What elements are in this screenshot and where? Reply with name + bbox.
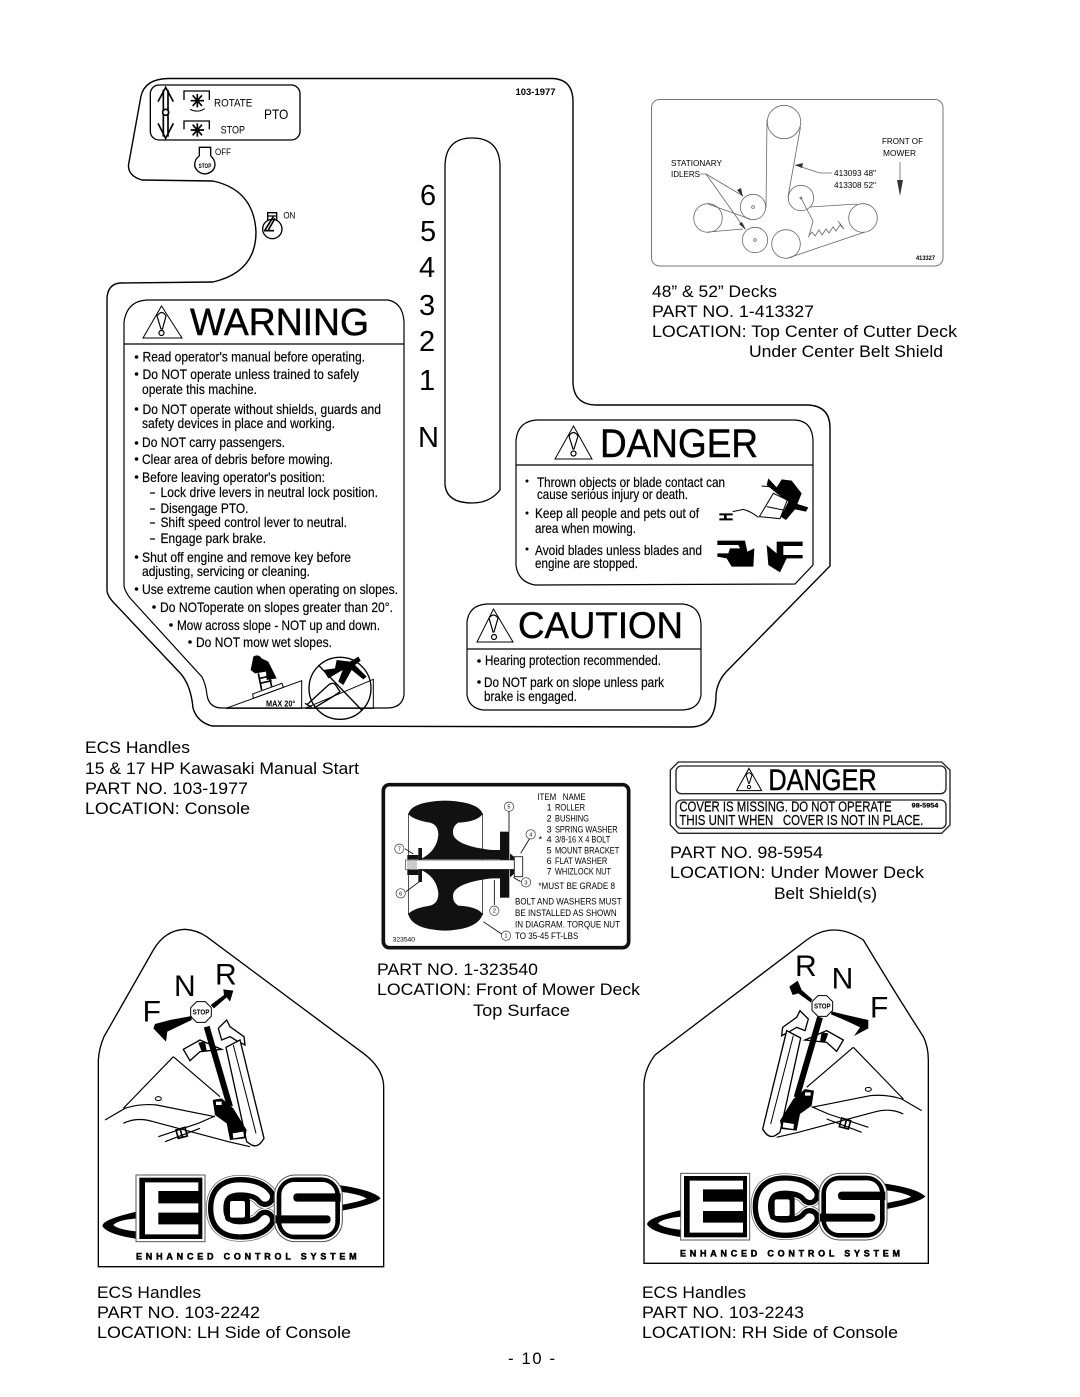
caption: right handle part number: ECS Handles (642, 1283, 746, 1302)
danger rules list: Avoid blades unless blades and (535, 542, 702, 558)
belt diagram labels: MOWER (883, 148, 916, 158)
warning rules list: Clear area of debris before mowing. (142, 451, 333, 467)
numbered callouts: 6 (399, 891, 402, 897)
item list and notes: WHIZLOCK NUT (555, 867, 611, 877)
item list and notes: TO 35-45 FT-LBS (515, 931, 578, 941)
warning rules list: Before leaving operator's position: (142, 469, 325, 485)
caption: left handle part number (97, 1283, 351, 1342)
belt diagram labels: IDLERS (671, 169, 700, 179)
speed numbers: 4 (419, 252, 435, 284)
PTO control symbols: ON (283, 210, 295, 220)
warning rules list: Disengage PTO. (160, 500, 248, 516)
numbered callouts (395, 802, 535, 940)
warning rules list: operate this machine. (142, 381, 257, 397)
warning rules list: Do NOT operate without shields, guards and (142, 401, 381, 417)
item list and notes: ITEM NAME (537, 792, 586, 802)
PTO control symbols: PTO (264, 106, 288, 122)
caption: console part number (85, 738, 359, 818)
warning triangle icon (143, 306, 182, 338)
direction arrows (153, 989, 233, 1042)
caution rules list: brake is engaged. (484, 688, 577, 704)
direction letters: N (174, 970, 196, 1003)
item list and notes: SPRING WASHER (555, 824, 618, 834)
warning rules list: Lock drive levers in neutral lock position. (160, 484, 378, 500)
warning rules list: Mow across slope - NOT up and down. (177, 617, 380, 633)
panel: roller assembly decal 323540 (383, 785, 629, 948)
warning message (679, 800, 939, 829)
panel: belt routing diagram decal 1-413327 (652, 100, 943, 266)
part code 103-1977: 103-1977 (516, 87, 556, 98)
item list and notes: IN DIAGRAM. TORQUE NUT (515, 919, 620, 929)
speed numbers: 5 (420, 216, 436, 248)
direction letters: F (870, 991, 888, 1024)
ECS logo (102, 1175, 381, 1242)
direction letters (795, 950, 888, 1024)
warning rules list: safety devices in place and working. (142, 415, 335, 431)
caption: cover decal part number: PART NO. 98-5954 (670, 843, 823, 862)
caption: roller decal part number: PART NO. 1-323540 (377, 960, 538, 979)
item list and notes: BOLT AND WASHERS MUST (515, 897, 622, 907)
stop sign: STOP (193, 1009, 210, 1016)
panel: right ECS handle decal 103-2243 (644, 930, 928, 1263)
danger rules list: cause serious injury or death. (537, 486, 688, 502)
speed numbers: 3 (419, 290, 435, 322)
stop sign (812, 996, 833, 1016)
decal borders (670, 762, 950, 833)
danger heading: DANGER (600, 422, 758, 466)
speed numbers: 1 (419, 365, 435, 397)
caption: decks part number: Under Center Belt Shield (749, 342, 943, 361)
warning message: COVER IS MISSING. DO NOT OPERATE (679, 800, 892, 816)
lever and handle drawing (105, 1020, 264, 1147)
item list and notes: 6 (547, 856, 552, 866)
caption: decks part number: LOCATION: Top Center of Cutter Deck (652, 322, 958, 341)
item list and notes: 3 (547, 824, 552, 834)
panel: warning block (124, 300, 404, 719)
speed numbers: 6 (420, 180, 436, 212)
direction arrows (789, 981, 868, 1036)
console decal outline (107, 78, 830, 727)
warning rules list: adjusting, servicing or cleaning. (142, 563, 310, 579)
direction letters: F (143, 996, 161, 1029)
caption: left handle part number: PART NO. 103-2242 (97, 1303, 260, 1322)
PTO control symbols: OFF (215, 147, 231, 157)
panel: cover missing danger decal 98-5954 (670, 762, 950, 833)
numbered callouts: 3 (524, 880, 528, 886)
caption: cover decal part number (670, 843, 925, 903)
caption: roller decal part number (377, 960, 641, 1020)
item list and notes: 3/8-16 X 4 BOLT (555, 835, 611, 845)
PTO control symbols: STOP (221, 124, 245, 136)
decal outline (644, 930, 928, 1263)
roller cross section (405, 801, 523, 931)
warning rules list (135, 348, 398, 650)
item list and notes: BUSHING (555, 814, 589, 824)
caution rules list (477, 652, 665, 704)
item list and notes: 1 (547, 803, 552, 813)
stop sign: STOP (814, 1003, 831, 1010)
warning box outline (124, 300, 404, 708)
numbered callouts: 1 (504, 934, 508, 940)
belt diagram labels: 413093 48" (834, 168, 876, 178)
caption: console part number: LOCATION: Console (85, 799, 250, 818)
heading: DANGER (768, 764, 877, 797)
caption: roller decal part number: Top Surface (473, 1001, 570, 1020)
belt diagram labels (671, 136, 935, 262)
caution rules list: Do NOT park on slope unless park (484, 674, 665, 690)
warning rules list: Do NOToperate on slopes greater than 20°. (160, 599, 393, 615)
item list and notes (393, 792, 622, 944)
item list and notes: MOUNT BRACKET (555, 845, 620, 855)
caption: roller decal part number: LOCATION: Front of Mower Deck (377, 980, 641, 999)
caption: cover decal part number: LOCATION: Under Mower Deck (670, 863, 925, 882)
danger rules list (526, 474, 725, 571)
icon: mower on 20 degree slope: MAX 20° (266, 699, 295, 709)
ECS logo (647, 1173, 925, 1240)
caution triangle icon (477, 609, 513, 642)
icon: thrown objects and running person (719, 478, 808, 520)
belt diagram arrowheads (737, 163, 903, 230)
page number: - 10 - (508, 1349, 555, 1368)
warning heading: WARNING (190, 302, 369, 344)
item list and notes: 2 (547, 814, 552, 824)
speed numbers: 2 (419, 326, 435, 358)
danger rules list: Keep all people and pets out of (535, 505, 699, 521)
logo tagline: ENHANCED CONTROL SYSTEM (136, 1251, 357, 1261)
caption: console part number: PART NO. 103-1977 (85, 779, 248, 798)
PTO control symbols: STOP (199, 163, 211, 170)
icon: foot near blade (767, 542, 803, 572)
belt diagram labels: 413327 (916, 255, 935, 262)
lever and handle drawing (763, 1011, 922, 1137)
logo tagline: ENHANCED CONTROL SYSTEM (680, 1249, 900, 1259)
item list and notes: 5 (547, 845, 552, 855)
numbered callouts: 2 (493, 909, 496, 915)
warning rules list: Do NOT mow wet slopes. (196, 634, 332, 650)
caption: decks part number (652, 282, 958, 361)
danger rules list: Thrown objects or blade contact can (537, 474, 725, 490)
caption: left handle part number: ECS Handles (97, 1283, 201, 1302)
warning rules list: Shift speed control lever to neutral. (160, 514, 347, 530)
decal outline (98, 929, 384, 1267)
warning message: THIS UNIT WHEN COVER IS NOT IN PLACE. (679, 813, 923, 829)
speed numbers: N (418, 422, 439, 454)
item list and notes: FLAT WASHER (555, 856, 608, 866)
warning message: 98-5954 (912, 803, 939, 809)
item list and notes: 7 (547, 867, 552, 877)
item list and notes: 323540 (393, 938, 416, 944)
direction letters: N (832, 962, 853, 995)
item list and notes: *MUST BE GRADE 8 (538, 881, 615, 891)
caution rules list: Hearing protection recommended. (485, 652, 661, 668)
PTO control symbols (150, 85, 300, 239)
throttle slot (445, 138, 500, 503)
numbered callouts: 4 (529, 832, 532, 838)
icon: prohibited mower tipping on slope (305, 657, 373, 719)
caption: cover decal part number: Belt Shield(s) (774, 884, 877, 903)
caution box outline (467, 604, 701, 710)
panel: console decal 103-1977 (107, 78, 830, 727)
item list and notes: * (539, 835, 543, 845)
belt diagram labels: 413308 52" (834, 180, 876, 190)
numbered callouts: 5 (507, 805, 511, 811)
warning rules list: Engage park brake. (160, 530, 266, 546)
caption: right handle part number: LOCATION: RH Side of Console (642, 1323, 898, 1342)
numbered callouts: 7 (398, 847, 401, 853)
decal border (383, 785, 629, 948)
caption: right handle part number (642, 1283, 898, 1342)
icon: mower on 20 degree slope (226, 655, 302, 709)
PTO control symbols: ROTATE (214, 98, 252, 110)
item list and notes: 4 (547, 835, 552, 845)
triangle icon (737, 768, 762, 791)
direction letters (143, 958, 237, 1029)
danger triangle icon (555, 426, 592, 459)
warning rules list: Shut off engine and remove key before (142, 549, 351, 565)
item list and notes: ROLLER (555, 803, 585, 813)
caution heading: CAUTION (518, 605, 683, 646)
caption: left handle part number: LOCATION: LH Side of Console (97, 1323, 351, 1342)
belt diagram labels: STATIONARY (671, 158, 722, 168)
warning rules list: Do NOT carry passengers. (142, 434, 285, 450)
pulleys and belts (694, 105, 900, 258)
warning rules list: Read operator's manual before operating. (142, 348, 365, 364)
caption: console part number: ECS Handles (85, 738, 190, 757)
icon: hands near blade (717, 541, 754, 567)
decal border (652, 100, 943, 266)
warning rules list: Do NOT operate unless trained to safely (142, 366, 359, 382)
danger rules list: engine are stopped. (535, 555, 638, 571)
direction letters: R (795, 950, 817, 983)
danger box outline (516, 420, 813, 585)
caption: decks part number: 48” & 52” Decks (652, 282, 777, 301)
stop sign (191, 1002, 211, 1022)
caption: console part number: 15 & 17 HP Kawasaki Manual Start (85, 759, 359, 778)
caption: decks part number: PART NO. 1-413327 (652, 302, 814, 321)
panel: caution block (467, 604, 701, 710)
warning rules list: Use extreme caution when operating on slopes. (142, 581, 398, 597)
danger rules list: area when mowing. (535, 520, 636, 536)
belt diagram labels: FRONT OF (882, 136, 923, 146)
direction letters: R (215, 958, 237, 991)
panel: danger block (516, 420, 813, 585)
item list and notes: BE INSTALLED AS SHOWN (515, 908, 617, 918)
panel: left ECS handle decal 103-2242 (98, 929, 384, 1267)
caption: right handle part number: PART NO. 103-2243 (642, 1303, 804, 1322)
speed numbers (418, 180, 439, 454)
